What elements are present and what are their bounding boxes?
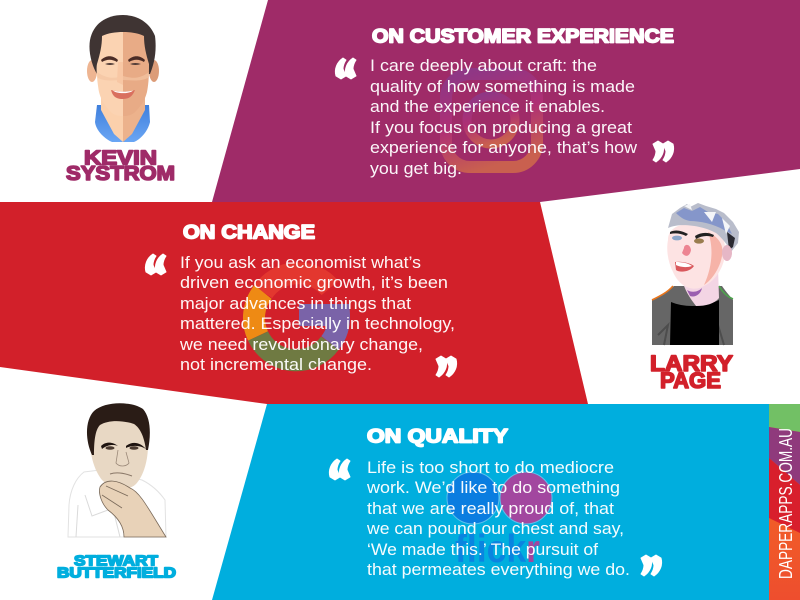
name: Stewart Butterfield: BUTTERFIELD bbox=[57, 564, 176, 582]
name: Kevin Systrom: SYSTROM bbox=[66, 163, 175, 185]
quote text: change: not incremental change. bbox=[180, 355, 372, 374]
quote text: customer experience bbox=[370, 56, 638, 178]
quote text: change bbox=[179, 253, 455, 374]
quote text: customer experience: If you focus on producing a great bbox=[370, 118, 632, 137]
quote text: customer experience: experience for anyone, that’s how bbox=[370, 138, 638, 157]
panel: change bbox=[0, 202, 588, 404]
panel: quality bbox=[212, 404, 769, 600]
quote text: change: If you ask an economist what’s bbox=[180, 253, 421, 272]
name: Larry Page: LARRY bbox=[650, 351, 733, 376]
icon: flickr watermark bbox=[447, 472, 552, 571]
portrait: Larry Page bbox=[652, 203, 739, 345]
heading: on change: ON CHANGE bbox=[183, 222, 315, 244]
name: Kevin Systrom bbox=[66, 148, 175, 185]
icon: opening quote bbox=[335, 58, 356, 79]
icon: closing quote bbox=[653, 141, 674, 162]
portrait: Stewart Butterfield bbox=[68, 403, 166, 537]
icon: opening quote bbox=[145, 254, 166, 275]
quote text: quality: ‘We made this.’ The pursuit of bbox=[367, 540, 598, 559]
icon: flickr watermark: flickr bbox=[455, 528, 540, 571]
name: Kevin Systrom: KEVIN bbox=[84, 148, 157, 170]
heading: on quality: ON QUALITY bbox=[367, 426, 508, 448]
icon: closing quote bbox=[436, 356, 457, 377]
sidebar: dapperapps.com.au: DAPPERAPPS.COM.AU bbox=[776, 428, 796, 579]
icon: opening quote bbox=[329, 459, 350, 480]
quote text: quality: Life is too short to do mediocre bbox=[367, 458, 614, 477]
name: Larry Page: PAGE bbox=[660, 368, 721, 393]
quote text: quality: that permeates everything we do. bbox=[367, 560, 630, 579]
heading: on customer experience: ON CUSTOMER EXPERIENCE bbox=[372, 26, 674, 48]
quote text: quality: work. We’d like to do something bbox=[366, 478, 620, 497]
quote text: quality: that we are really proud of, that bbox=[367, 499, 614, 518]
name: Stewart Butterfield bbox=[57, 552, 176, 582]
quote text: change: mattered. Especially in technology, bbox=[180, 314, 455, 333]
quote text: change: we need revolutionary change, bbox=[179, 335, 423, 354]
quote text: customer experience: I care deeply about craft: the bbox=[370, 56, 597, 75]
icon: closing quote bbox=[641, 555, 662, 576]
quote text: customer experience: quality of how something is made bbox=[370, 77, 635, 96]
name: Larry Page bbox=[650, 351, 733, 393]
portrait: Kevin Systrom bbox=[87, 15, 159, 142]
panel: customer experience bbox=[212, 0, 800, 202]
name: Stewart Butterfield: STEWART bbox=[74, 552, 158, 570]
quote text: quality bbox=[366, 458, 630, 579]
icon: instagram watermark bbox=[446, 74, 537, 167]
quote text: customer experience: you get big. bbox=[370, 159, 462, 178]
quote text: change: driven economic growth, it’s been bbox=[180, 273, 448, 292]
quote text: change: major advances in things that bbox=[180, 294, 411, 313]
icon: google watermark bbox=[254, 273, 339, 360]
quote text: quality: we can pound our chest and say, bbox=[366, 519, 624, 538]
quote text: customer experience: and the experience it enables. bbox=[370, 97, 605, 116]
sidebar: dapperapps.com.au bbox=[769, 404, 800, 600]
